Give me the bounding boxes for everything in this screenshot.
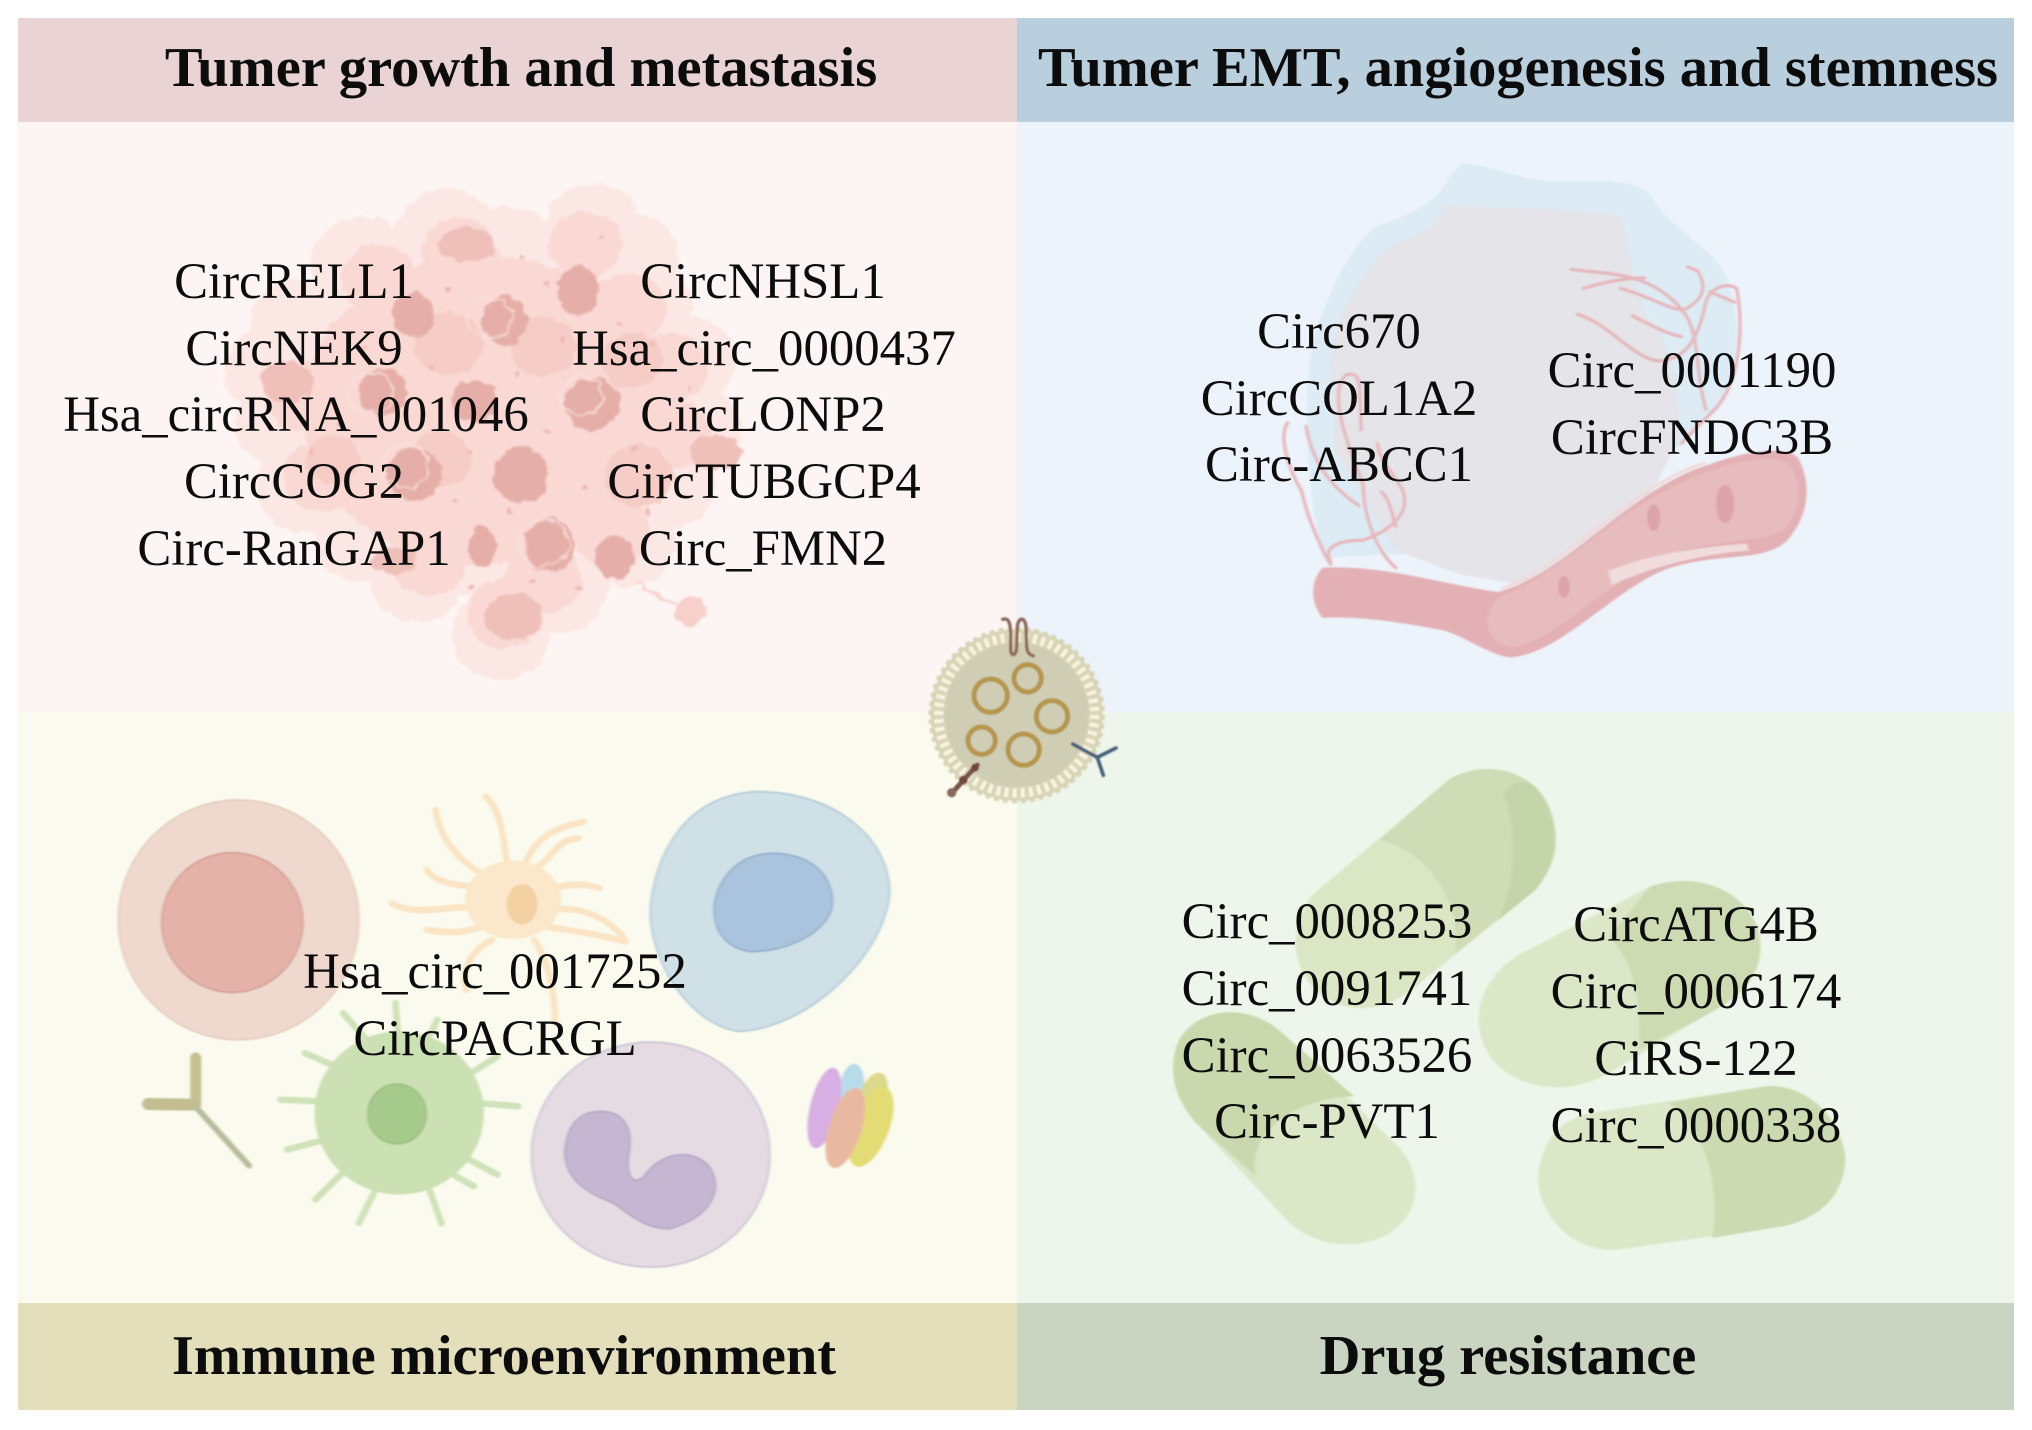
illustration: immune cells [118,792,903,1267]
icon: green immune cell [280,1003,518,1224]
illustration: tumor with blood vessel [1284,164,1807,658]
gene list: left column [1201,303,1477,492]
heading: tumor growth and metastasis: Tumer growth and metastasis [165,37,877,99]
icon: capsule 2 [1479,881,1760,1087]
gene list: left column: CircCOL1A2 [1201,370,1477,426]
heading: drug resistance: Drug resistance [1320,1325,1696,1387]
gene list: left column [1182,893,1472,1149]
gene list: left column: Hsa_circRNA_001046 [63,386,529,442]
icon: central exosome [931,619,1116,801]
gene list: right column: CircFNDC3B [1551,409,1833,465]
heading bar: tumor growth and metastasis [18,18,1017,122]
gene list: right column [572,253,956,576]
gene list: Hsa_circ_0017252 [303,943,687,999]
gene list: right column: Hsa_circ_0000437 [572,320,956,376]
icon: platelets [801,1063,903,1170]
gene list: right column: CircNHSL1 [640,253,886,309]
icon: dendritic cell [392,797,626,1023]
panel: tumor growth and metastasis [18,18,1017,712]
gene list: left column [63,253,529,576]
gene list: right column: Circ_FMN2 [639,520,887,576]
gene list: CircPACRGL [353,1010,637,1066]
gene list: left column: CircNEK9 [185,320,403,376]
gene list: right column: CircATG4B [1573,896,1819,952]
panel: drug resistance [1017,712,2014,1410]
icon: capsule 1 [1296,769,1556,1008]
gene list: right column: Circ_0006174 [1551,963,1841,1019]
gene list: right column: CircLONP2 [640,386,886,442]
gene list: right column [1548,342,1836,465]
icon: capsule 3 [1173,1012,1416,1244]
gene list: left column: CircCOG2 [184,453,404,509]
heading bar: tumor EMT, angiogenesis and stemness [1017,18,2014,122]
gene list: left column: Circ_0091741 [1182,960,1472,1016]
gene list: left column: Circ_0063526 [1182,1027,1472,1083]
gene list: right column: CircTUBGCP4 [607,453,921,509]
gene list [303,943,687,1066]
gene list: left column: Circ_0008253 [1182,893,1472,949]
heading bar: immune microenvironment [18,1303,1017,1410]
panel: tumor EMT, angiogenesis and stemness [1017,18,2014,712]
heading bar: drug resistance [1017,1303,2014,1410]
heading: tumor EMT, angiogenesis and stemness: Tumer EMT, angiogenesis and stemness [1038,37,1998,99]
icon: purple neutrophil [531,1042,770,1267]
panel: immune microenvironment [18,712,1017,1410]
gene list: left column: Circ-ABCC1 [1205,436,1473,492]
illustration: capsules [1173,769,1845,1250]
gene list: left column: Circ-PVT1 [1214,1093,1440,1149]
icon: red immune cell [118,800,359,1040]
illustration: tumor cell cluster [224,183,743,680]
gene list: left column: Circ670 [1257,303,1421,359]
heading: immune microenvironment: Immune microenvironment [172,1325,836,1387]
icon: antibody [148,1058,249,1166]
gene list: right column [1551,896,1841,1153]
icon: capsule 4 [1538,1086,1845,1250]
gene list: left column: CircRELL1 [174,253,414,309]
gene list: right column: CiRS-122 [1594,1030,1798,1086]
icon: blue immune cell [650,792,890,1031]
gene list: right column: Circ_0000338 [1551,1097,1841,1153]
gene list: left column: Circ-RanGAP1 [137,520,451,576]
gene list: right column: Circ_0001190 [1548,342,1836,398]
